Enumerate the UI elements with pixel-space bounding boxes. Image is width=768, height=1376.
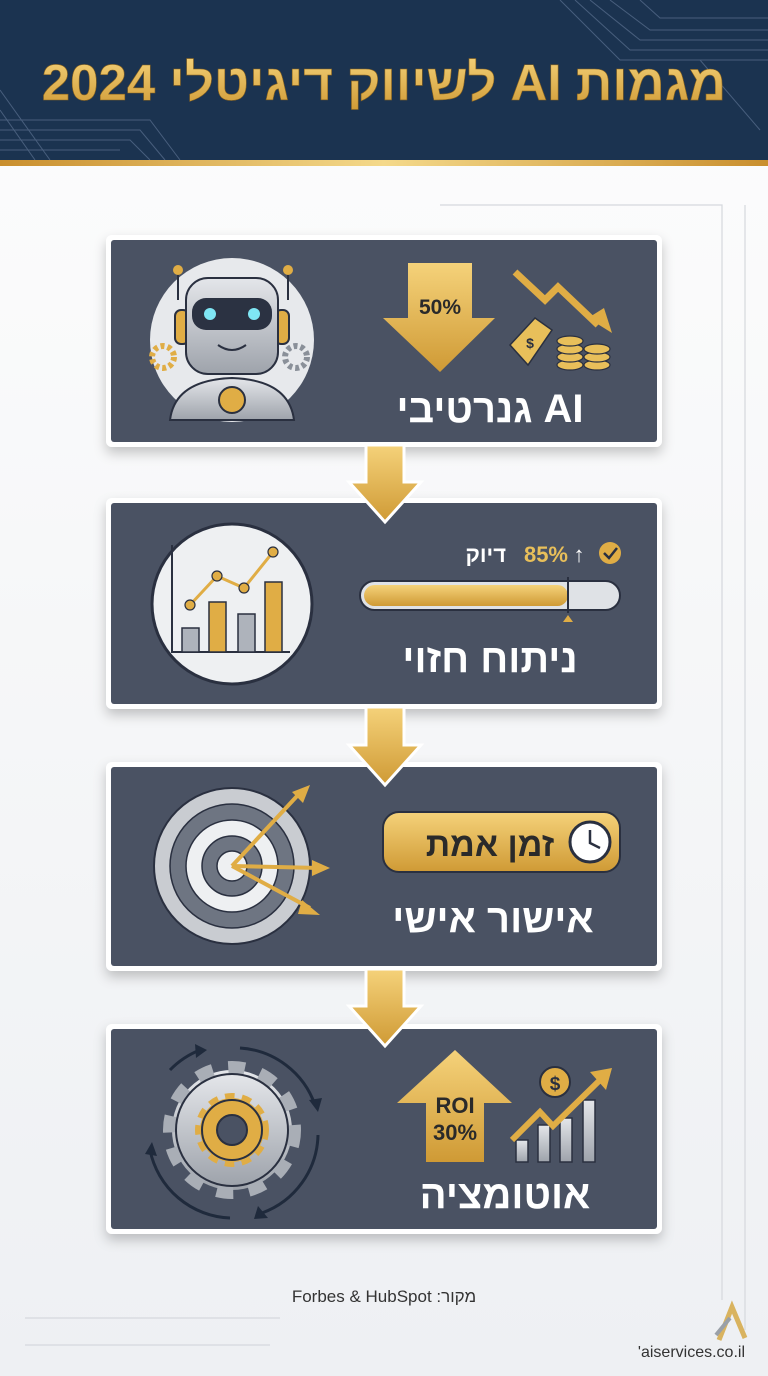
source footer: מקור: Forbes & HubSpot [292,1287,476,1306]
icon: target with arrows [154,785,330,944]
pill: real time: זמן אמת [426,826,554,864]
arrow 3 [349,969,421,1046]
title: מגמות AI לשיווק דיגיטלי 2024 [42,54,726,111]
label: personalization: אישור אישי [392,897,594,941]
icon: ROI up arrow: 30% [433,1120,477,1145]
logo [716,1307,745,1340]
icon: ROI up arrow: ROI [435,1093,475,1118]
decorative frame [25,205,745,1345]
panel 1: generative AI [106,235,662,447]
label: predictive analytics: ניתוח חזוי [402,637,578,681]
accuracy stat [466,542,621,567]
arrow 2 [349,707,421,785]
icon: ROI up arrow [397,1050,512,1162]
icon: 50% down arrow [383,263,495,372]
website: 'aiservices.co.il [638,1344,745,1361]
panel 3: personalization [106,762,662,971]
accuracy stat: 85% [524,542,568,567]
accuracy stat: ↑ [574,542,584,567]
header banner [0,0,768,166]
accuracy stat: דיוק [466,542,506,567]
icon: rising chart with dollar [512,1067,612,1162]
icon: 50% down arrow: 50% [419,296,461,319]
icon: gear with cycle arrows [145,1044,322,1219]
arrow 1 [349,445,421,522]
panel 4: automation [106,1024,662,1234]
pill: real time [383,812,620,872]
icon: rising chart with dollar: $ [550,1074,561,1095]
panel 2: predictive analytics [106,498,662,709]
icon: falling price chart with coins [510,272,612,370]
icon: robot [150,258,314,422]
icon: bar chart circle [152,524,312,684]
label: generative AI: AI גנרטיבי [396,387,584,431]
progress bar [360,577,620,622]
icon: falling price chart with coins: $ [526,335,534,351]
label: automation: אוטומציה [420,1173,590,1217]
